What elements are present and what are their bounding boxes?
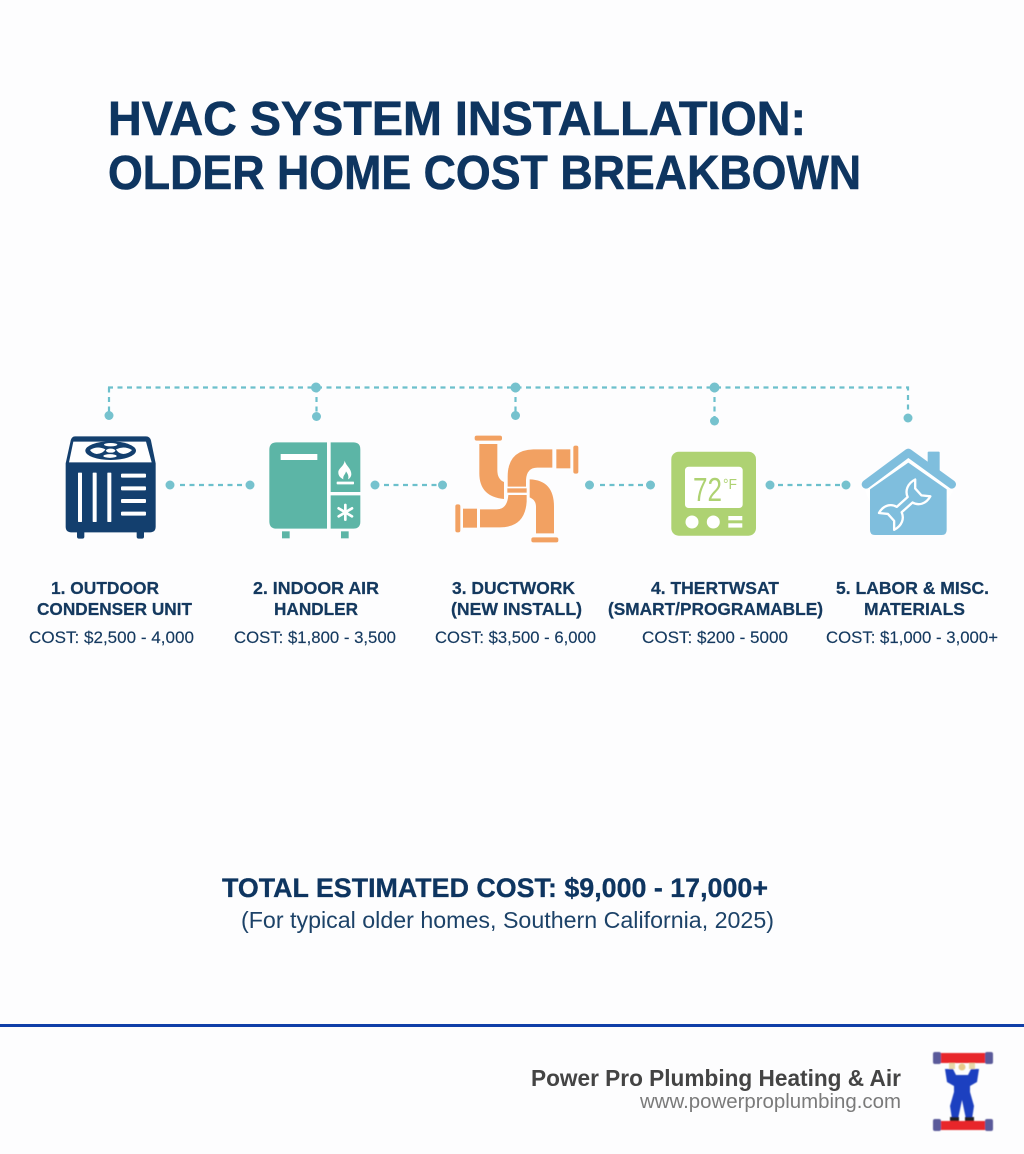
label: outdoor condenser unit: 1. OUTDOOR (51, 578, 159, 598)
label: indoor air handler: 2. INDOOR AIR (253, 578, 379, 598)
footer company text (531, 1065, 901, 1113)
label: thermostat (608, 578, 823, 647)
total cost: (For typical older homes, Southern California, 2025) (241, 907, 774, 933)
label: thermostat: 4. THERTWSAT (651, 578, 779, 598)
label: ductwork: COST: $3,500 - 6,000 (435, 629, 596, 647)
icon: house with wrench (865, 452, 953, 535)
total cost: TOTAL ESTIMATED COST: $9,000 - 17,000+ (222, 873, 768, 903)
title: HVAC SYSTEM INSTALLATION: (108, 93, 806, 146)
label: indoor air handler (234, 578, 396, 647)
title: OLDER HOME COST BREAKBOWN (108, 147, 861, 200)
icon: outdoor condenser unit (66, 436, 156, 539)
label: labor and materials: 5. LABOR & MISC. (836, 578, 989, 598)
icon: company logo (933, 1052, 993, 1131)
label: ductwork: 3. DUCTWORK (452, 578, 575, 598)
label: labor and materials: MATERIALS (864, 599, 965, 619)
label: labor and materials (826, 578, 998, 647)
icon: indoor air handler (269, 442, 360, 538)
label: indoor air handler: HANDLER (274, 599, 358, 619)
icon: thermostat (671, 452, 756, 536)
icon: thermostat: °F (723, 476, 737, 493)
label: ductwork (435, 578, 596, 647)
total cost (222, 873, 774, 933)
label: indoor air handler: COST: $1,800 - 3,500 (234, 629, 396, 647)
footer company text: www.powerproplumbing.com (639, 1091, 901, 1113)
label: labor and materials: COST: $1,000 - 3,000+ (826, 629, 998, 647)
title (108, 93, 861, 200)
label: ductwork: (NEW INSTALL) (451, 599, 582, 619)
icon: ductwork pipes (455, 436, 578, 542)
label: outdoor condenser unit (29, 578, 194, 647)
label: outdoor condenser unit: COST: $2,500 - 4,000 (29, 629, 194, 647)
footer company text: Power Pro Plumbing Heating & Air (531, 1065, 901, 1091)
dotted connector network (104, 382, 912, 490)
label: thermostat: COST: $200 - 5000 (642, 629, 788, 647)
label: outdoor condenser unit: CONDENSER UNIT (37, 599, 192, 619)
label: thermostat: (SMART/PROGRAMABLE) (608, 599, 823, 619)
footer rule (0, 1024, 1024, 1027)
icon: thermostat: 72 (693, 471, 722, 508)
